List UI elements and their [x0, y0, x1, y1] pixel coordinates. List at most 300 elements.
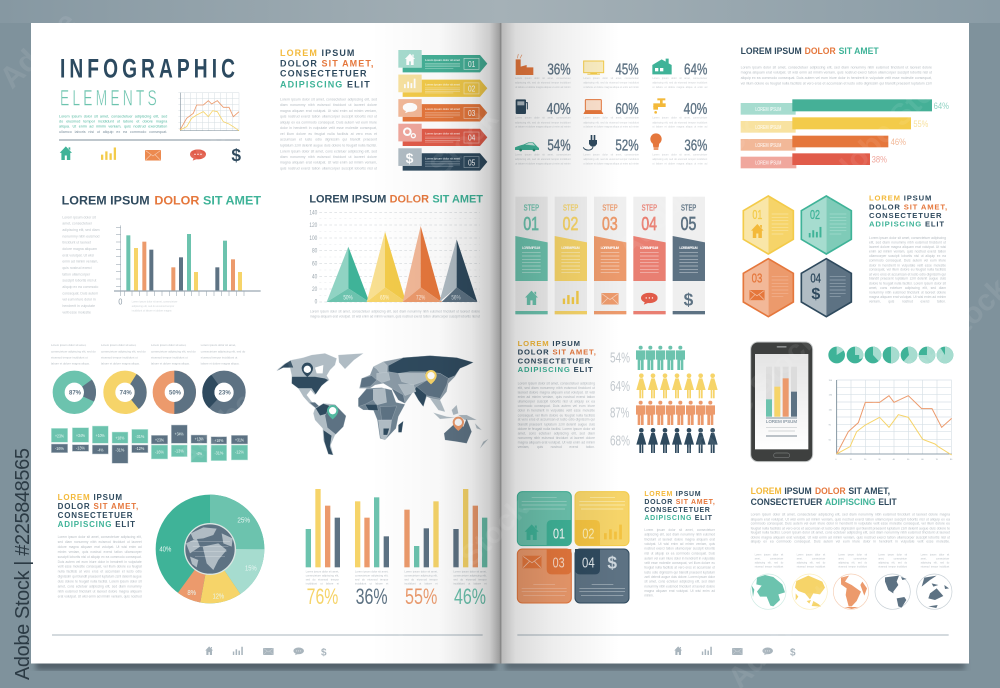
triangle chart [309, 209, 480, 306]
two-line heading: ELIT [878, 497, 897, 507]
horizontal bar heading: DOLOR [805, 46, 836, 56]
triangle 72% [403, 226, 442, 302]
watermark: Adobe Stock [812, 52, 965, 205]
triangle chart: 60 [312, 261, 318, 268]
step 01: LOREM IPSUM [522, 246, 541, 250]
row: navy women [636, 428, 718, 453]
large line chart: 80 [950, 459, 953, 461]
row: teal men [636, 346, 685, 370]
step columns [515, 197, 705, 314]
bar 46%: 46% [891, 137, 906, 147]
fuel pump 40% [516, 99, 527, 114]
globe: Australia [917, 574, 952, 609]
column bar chart: 0 [118, 297, 122, 307]
bar chart description: tincidunt ut laoreet [62, 241, 91, 245]
stock id label: Adobe Stock | #225848565 [12, 448, 34, 680]
globe [185, 524, 235, 574]
column bar chart [114, 225, 261, 307]
up and down boxes chart: +34% [76, 433, 85, 439]
globe captions [755, 553, 949, 569]
watermark: Adobe Stock [672, 322, 825, 475]
heading: lorem ipsum block: ADIPISCING ELIT [869, 220, 945, 229]
large line chart: 50 [829, 439, 832, 441]
up and down boxes chart: -31% [115, 447, 125, 453]
South America [313, 403, 346, 455]
triangle chart heading: DOLOR [390, 194, 429, 206]
watermark: Adobe Stock [382, 492, 535, 645]
bar chart description: enim ad minim veniam, [62, 260, 98, 264]
bar chart description: Lorem ipsum dolor sit [62, 215, 96, 219]
ribbon 03 [398, 99, 487, 121]
two-line heading: ADIPISCING [825, 497, 876, 507]
bulb 36% [650, 133, 662, 150]
icon stats grid: 60% [615, 101, 639, 118]
two-line heading: SIT AMET, [848, 486, 890, 496]
left page, upper section [59, 48, 487, 319]
bar 46% [741, 136, 906, 151]
donut 50%: 50% [169, 390, 181, 397]
triangle 56%: 56% [451, 294, 461, 301]
ribbon 03: 03 [468, 109, 476, 118]
step 04: STEP [642, 203, 657, 213]
triangle chart: 40 [312, 273, 318, 280]
large line chart: 50 [907, 459, 910, 461]
heading: lorem ipsum block: LOREM IPSUM [644, 491, 701, 498]
triangle 50%: 50% [343, 294, 353, 301]
bar 64% [741, 99, 949, 115]
up and down boxes chart: -13% [175, 448, 184, 454]
triangle chart: 0 [315, 299, 318, 306]
large line chart: 20 [864, 459, 867, 461]
heading: lorem ipsum block: DOLOR SIT AMET, [280, 58, 375, 68]
intro text: do eiusmod tempor incididunt ut labore et dolore magna [59, 120, 167, 124]
donut captions [51, 342, 248, 367]
bar chart caption: adipiscing elit, sed do eiusmod tempor [132, 305, 174, 308]
step 05: $ [684, 289, 694, 309]
step 01 [515, 197, 548, 314]
tile 03: 03 [553, 555, 565, 571]
up and down boxes chart: -12% [135, 446, 145, 452]
donut captions: labore et dolore magna aliqua. [51, 362, 90, 365]
map pin: teal [327, 405, 338, 419]
heading: lorem ipsum block: ADIPISCING ELIT [518, 365, 594, 374]
globe: Asia [792, 574, 827, 609]
heading: lorem ipsum block [518, 339, 597, 374]
up and down boxes chart: +31% [235, 437, 244, 443]
icon row [60, 145, 241, 165]
donut captions: consectetuer adipiscing elit, sed do [51, 350, 96, 353]
ribbon 02: 02 [468, 85, 476, 94]
donut 23% [208, 377, 240, 408]
heading: lorem ipsum block: ADIPISCING ELIT [280, 79, 371, 89]
big percentages [307, 584, 486, 609]
icon stats grid: 36% [547, 61, 571, 78]
donut captions: consectetuer adipiscing elit, sed do [151, 350, 196, 353]
triangle chart: 120 [309, 222, 318, 229]
donut 87%: 87% [69, 390, 81, 397]
smartphone with bar chart: LOREM IPSUM [766, 419, 797, 424]
heading: lorem ipsum block [869, 194, 948, 229]
spine shadow [370, 23, 630, 664]
world map [277, 353, 488, 455]
bar chart caption [132, 299, 178, 313]
triangle chart heading: SIT AMET [432, 194, 483, 206]
plug 52% [583, 135, 597, 150]
triangle 72%: 72% [416, 294, 426, 301]
building 64% [652, 59, 672, 74]
footer icons [205, 646, 327, 658]
step 01: 01 [523, 213, 539, 234]
step 05 [673, 197, 705, 314]
heading: lorem ipsum block: CONSECTETUER [58, 511, 133, 520]
heading: lorem ipsum block: CONSECTETUER [280, 69, 368, 79]
large line chart: 60 [921, 459, 924, 461]
bar chart description: dolore magna aliquam [62, 247, 97, 251]
bar 38% [741, 153, 887, 168]
intro text [59, 114, 167, 135]
two-line heading: IPSUM [784, 486, 812, 496]
step 04 [633, 197, 666, 314]
step 05: LOREM IPSUM [679, 246, 698, 250]
icon stats grid: 45% [615, 61, 639, 78]
bar chart description: amet, consectetuer [62, 222, 92, 226]
up and down boxes chart: -4% [196, 451, 202, 457]
car 54% [515, 142, 539, 151]
globes paragraph: Lorem ipsum dolor sit amet, consectetuer adipiscing elit, sed diam nonummy nibh euismod tincidunt ut laoreet dolore magna aliquam erat volutpat. Ut wisi enim ad minim veniam, quis nostrud exerci tation ullamcorper suscipit lobortis nisl ut aliquip ex ea commodo consequat. Duis autem vel eum iriure dolor in hendrerit in vulputate velit esse molestie consequat, vel illum dolore eu feugiat nulla facilisis at vero eros et accumsan et iusto odio dignissim qui blandit praesent luptatum zzril delenit augue duis dolore te feugait nulla facilisi. Lorem ipsum dolor sit amet, cons ectetuer adipiscing elit, sed diam nonummy nibh euismod tincidunt ut laoreet dolore magna aliquam erat volutpat. Ut wisi enim ad minim veniam, quis nostrud exerci tation ullamcorper suscipit lobortis nisl ut aliquip ex ea commodo consequat. Duis autem vel eum iriure dolor in hendrerit in vulputate velit esse molestie. [751, 513, 950, 544]
bar chart description: quis nostrud exerci [62, 266, 92, 270]
up and down boxes chart [51, 425, 248, 463]
bar chart description [62, 214, 105, 314]
up and down boxes chart: -31% [214, 450, 224, 456]
hexagon 01: 01 [752, 207, 762, 222]
large line chart: 70 [936, 459, 939, 461]
title: INFOGRAPHIC [60, 54, 235, 83]
donut captions: Lorem ipsum dolor sit amet, [51, 343, 86, 347]
icon stats grid: 52% [615, 138, 639, 155]
pie chart with globe [159, 509, 257, 601]
step 03: 03 [602, 213, 618, 234]
big percentages: 55% [405, 584, 437, 609]
tile 04: $ [607, 552, 617, 572]
watermark: Adobe Stock [157, 42, 310, 195]
up and down boxes chart: -31% [135, 434, 145, 440]
globe: North America [875, 574, 910, 609]
people pictogram chart [610, 346, 718, 453]
bar 38%: 38% [872, 155, 887, 165]
step 03 [594, 197, 626, 314]
heading: lorem ipsum block [58, 493, 139, 529]
large line chart: 150 [829, 380, 833, 382]
up and down boxes chart: -4% [97, 447, 104, 453]
heading: lorem ipsum block: CONSECTETUER [644, 507, 711, 514]
heading: lorem ipsum block: LOREM IPSUM [869, 194, 932, 203]
triangle chart: 100 [309, 235, 318, 242]
pie chart with globe: 12% [213, 592, 224, 601]
monitor 45% [584, 61, 604, 75]
icon row: $ [231, 145, 241, 165]
large line chart: 110 [829, 410, 833, 412]
ribbon 04: Lorem ipsum dolor sit amet [425, 132, 460, 136]
mini line chart [178, 93, 239, 131]
up and down boxes chart: +18% [214, 438, 224, 444]
ribbon list [398, 50, 487, 171]
globes row [751, 574, 952, 609]
up and down boxes chart: -16% [155, 449, 164, 455]
step 02: LOREM IPSUM [561, 246, 580, 250]
ribbon 01: Lorem ipsum dolor sit amet [425, 58, 460, 62]
step 03: STEP [602, 203, 618, 213]
people pictogram chart: 64% [610, 379, 630, 395]
large line chart [829, 380, 953, 461]
bar chart heading: LOREM IPSUM [62, 193, 150, 207]
globe: South America [833, 574, 869, 609]
grouped bars captions [306, 570, 487, 586]
tile 04: 04 [582, 555, 595, 571]
large line chart: 40 [893, 459, 896, 461]
tile 04 [575, 549, 629, 603]
ribbon 04: 04 [468, 134, 476, 143]
bar chart description: hendrerit in vulputate [62, 304, 95, 308]
triangle 65% [367, 232, 406, 302]
grouped bars [306, 489, 487, 567]
ribbon 03: Lorem ipsum dolor sit amet [425, 107, 460, 111]
right page, lower section [517, 339, 953, 658]
hexagon 04: $ [811, 286, 820, 303]
up and down boxes chart: +13% [195, 437, 204, 443]
donut captions: consectetuer adipiscing elit, sed do [201, 350, 245, 353]
donut captions: consectetuer adipiscing elit, sed do [101, 350, 146, 353]
donut captions: Lorem ipsum dolor sit amet, [201, 343, 236, 347]
ribbon 05 [398, 148, 487, 171]
donut captions: labore et dolore magna aliqua. [101, 362, 140, 365]
bar 55% [741, 117, 928, 133]
icon stats grid: 40% [684, 101, 708, 118]
ribbon 04 [398, 124, 487, 146]
triangle chart: 20 [312, 286, 318, 293]
donut captions: eiusmod tempor incididunt ut [151, 356, 188, 359]
intro text: ullamco laboris nisi ut aliquip ex ea commodo consequat. [59, 130, 167, 134]
horizontal bar heading: SIT AMET [839, 46, 879, 56]
smartphone with bar chart [751, 342, 813, 462]
tile 02: 02 [582, 526, 594, 542]
horizontal bar heading: LOREM IPSUM [741, 46, 802, 56]
triangle chart heading [309, 194, 483, 206]
icon stats grid [515, 54, 708, 166]
bar chart description: aliquip ex ea commodo [62, 285, 98, 289]
step 04: 04 [641, 213, 657, 234]
heading: lorem ipsum block: LOREM IPSUM [518, 339, 581, 348]
mini pie row [828, 347, 953, 363]
donut captions: Lorem ipsum dolor sit amet, [101, 343, 136, 347]
tap 40% [653, 98, 666, 114]
map pin: navy [302, 363, 313, 377]
paragraph: Lorem ipsum dolor sit amet, consectetuer adipiscing elit, sed diam nonummy nibh euismod tincidunt ut laoreet dolore magna aliquam erat volutpat. Ut wisi enim ad minim veniam, quis nostrud exerci tation ullamcorper suscipit lobortis nisl ut aliquip ex ea commodo consequat. Duis autem vel eum iriure dolor in hendrerit in vulputate velit esse molestie consequat, vel illum dolore eu feugiat nulla facilisis at vero eros et accumsan et iusto odio dignissim qui blandit praesent luptatum zzril delenit augue duis dolore te feugait nulla facilisi. Lorem ipsum dolor sit amet, cons ectetuer adipiscing elit, sed diam nonummy nibh euismod tincidunt ut laoreet dolore magna aliquam erat volutpat. Ut wisi enim ad minim veniam, quis nostrud exerci tation. [869, 236, 946, 303]
large line chart: 90 [829, 424, 832, 426]
large line chart: 130 [829, 395, 833, 397]
hexagon 03: 03 [752, 270, 762, 285]
heading: lorem ipsum block: DOLOR SIT AMET, [644, 499, 716, 506]
donut 50% [159, 377, 190, 408]
bar chart description: erat volutpat. Ut wisi [62, 253, 94, 257]
watermark: Adobe Stock [172, 322, 325, 475]
people pictogram chart: 87% [610, 406, 629, 422]
heading: lorem ipsum block [280, 48, 375, 89]
bar chart description: nonummy nibh euismod [62, 234, 99, 238]
step 01: STEP [524, 203, 539, 213]
icon stats grid: 54% [547, 138, 571, 155]
icon stats grid: 40% [547, 101, 571, 118]
up and down boxes chart: +18% [115, 435, 125, 441]
triangle 65%: 65% [380, 294, 390, 301]
left page, lower section [51, 342, 487, 658]
globe: Africa and Europe [751, 574, 786, 609]
hexagon 04 [801, 259, 851, 317]
up and down boxes chart: -13% [76, 446, 85, 452]
Eurasia [359, 356, 473, 412]
square tiles [517, 492, 629, 603]
icon stats grid: 64% [684, 61, 708, 78]
bar chart description: velit esse molestie [62, 310, 91, 314]
big percentages: 36% [356, 584, 388, 609]
people pictogram chart: 68% [610, 434, 630, 450]
row: orange men [636, 401, 715, 425]
bar 55%: LOREM IPSUM [755, 125, 782, 131]
intro text: Lorem ipsum dolor sit amet, consectetuer adipiscing elit, sed [59, 115, 167, 119]
two-line heading: LOREM [751, 486, 782, 496]
heading: lorem ipsum block [644, 491, 716, 522]
bar chart description: tation ullamcorper [62, 272, 90, 276]
donut captions: Lorem ipsum dolor sit amet, [151, 343, 186, 347]
large line chart: 10 [850, 459, 853, 461]
tile 01: 01 [553, 526, 565, 542]
right page, upper section [515, 46, 949, 318]
step 02: 02 [563, 213, 578, 234]
donut captions: eiusmod tempor incididunt ut [51, 356, 88, 359]
laptop 60% [583, 100, 603, 114]
bar chart description: vel eum iriure dolor in [62, 298, 96, 302]
footer icons: $ [790, 647, 796, 658]
step 03: LOREM IPSUM [601, 246, 619, 250]
donut captions: labore et dolore magna aliqua. [151, 362, 190, 365]
pie chart with globe: 25% [237, 516, 250, 525]
bar 46%: LOREM IPSUM [755, 143, 782, 149]
ribbon 02: Lorem ipsum dolor sit amet [425, 83, 460, 87]
pie chart with globe: 8% [187, 588, 196, 597]
ribbon 02 [398, 75, 487, 97]
step 05: 05 [681, 213, 696, 234]
ribbon 01: 01 [468, 60, 476, 69]
map pin: orange [453, 417, 464, 431]
bar chart description: consequat. Duis autem [62, 291, 98, 295]
donut captions: labore et dolore magna aliqua. [201, 362, 239, 365]
Africa [358, 388, 405, 440]
horizontal bar heading [741, 46, 879, 56]
heading: lorem ipsum block: ADIPISCING ELIT [644, 515, 713, 522]
step 02 [555, 197, 587, 314]
map pin: yellow [425, 370, 437, 384]
footer icons: $ [321, 647, 327, 658]
donut 74%: 74% [120, 390, 132, 397]
intro text: aliqua. Ut enim ad minim veniam, quis nostrud exercitation [59, 125, 167, 129]
bar chart caption: Lorem ipsum dolor sit amet, consectetuer [132, 300, 178, 303]
heading: lorem ipsum block: CONSECTETUER [869, 211, 942, 220]
two-line heading: CONSECTETUER [751, 497, 823, 507]
heading: lorem ipsum block: CONSECTETUER [518, 356, 591, 365]
horizontal bar chart [741, 99, 949, 168]
hexagon 04: 04 [810, 270, 821, 285]
bar chart heading: DOLOR [154, 193, 199, 207]
step 04: LOREM IPSUM [640, 246, 659, 250]
big percentages: 76% [307, 584, 338, 609]
donut 23%: 23% [219, 390, 231, 397]
heading: lorem ipsum block: DOLOR SIT AMET, [518, 348, 597, 357]
up and down boxes chart: -16% [55, 446, 64, 452]
people pictogram chart: 54% [610, 351, 630, 367]
North America [277, 353, 363, 409]
donut captions: eiusmod tempor incididunt ut [101, 356, 138, 359]
bar chart description: suscipit lobortis nisl ut [62, 279, 96, 283]
large line chart: 30 [878, 459, 881, 461]
paragraph: Lorem ipsum dolor sit amet, consectetuer adipiscing elit, sed diam nonummy nibh euismod tincidunt ut laoreet dolore magna aliquam erat volutpat. Ut wisi enim ad minim veniam, quis nostrud exerci tation ullamcorper suscipit lobortis nisl ut aliquip ex ea commodo consequat. Duis autem vel eum iriure dolor in hendrerit in vulputate velit esse molestie consequat, vel illum dolore eu feugiat nulla facilisis at vero eros et accumsan et iusto odio dignissim qui blandit praesent luptatum zzril delenit augue duis dolore te feugait nulla facilisi. Lorem ipsum dolor sit amet, cons ectetuer adipiscing elit, sed diam nonummy nibh euismod tincidunt ut laoreet dolore magna aliquam erat volutpat. Ut wisi enim ad minim veniam, quis nostrud exerci tation. [518, 382, 595, 449]
watermark: Adobe Stock [612, 112, 765, 265]
large line chart: 0 [835, 459, 837, 461]
donut 87% [59, 377, 90, 408]
pie chart with globe: 15% [245, 563, 257, 572]
up and down boxes chart: +23% [55, 433, 64, 439]
triangle chart heading: LOREM IPSUM [309, 194, 386, 206]
up and down boxes chart: -12% [235, 450, 244, 456]
bar 64%: LOREM IPSUM [755, 107, 782, 113]
ribbon 05: 05 [468, 158, 476, 167]
heading: lorem ipsum block: DOLOR SIT AMET, [58, 502, 139, 511]
triangle 56% [439, 239, 477, 302]
triangle chart: 80 [312, 248, 318, 255]
bar 64%: 64% [934, 101, 949, 111]
ribbon 01 [398, 50, 487, 72]
two-line heading: DOLOR [815, 486, 846, 496]
Oceania and islands [433, 405, 488, 448]
footer icons [674, 646, 796, 658]
up and down boxes chart: +10% [96, 433, 105, 439]
bar chart heading: SIT AMET [203, 193, 261, 207]
icon stats grid: 36% [684, 138, 708, 155]
donut charts [59, 377, 240, 408]
watermark: Adobe Stock [352, 102, 505, 255]
heading: lorem ipsum block: ADIPISCING ELIT [58, 520, 136, 529]
ribbon 05: $ [406, 150, 414, 166]
donut captions: eiusmod tempor incididunt ut [201, 356, 237, 359]
bar 55%: 55% [913, 119, 928, 129]
triangle chart: 140 [309, 209, 318, 216]
bar chart description: adipiscing elit, sed diam [62, 228, 99, 232]
bar chart heading [62, 193, 261, 207]
paragraph: Lorem ipsum dolor sit amet, consectetuer adipiscing elit, sed diam nonummy nibh euismod tincidunt ut laoreet dolore magna aliquam erat volutpat. Ut wisi enim ad minim veniam, quis nostrud exerci tation ullamcorper suscipit lobortis nisl ut aliquip ex ea commodo consequat. Duis autem vel eum iriure dolor in hendrerit in vulputate velit esse molestie consequat, vel illum dolore eu feugiat nulla facilisis at vero eros et accumsan et iusto odio dignissim qui blandit praesent luptatum zzril delenit augue duis dolore. Lorem ipsum dolor sit amet, cons ectetuer adipiscing elit, sed diam nonummy nibh euismod tincidunt ut laoreet dolore magna aliquam erat volutpat. Ut wisi enim ad minim. [644, 528, 715, 598]
subtitle: ELEMENTS [60, 85, 157, 110]
up and down boxes chart: +23% [155, 437, 164, 443]
up and down boxes chart: +34% [175, 432, 184, 438]
heading: lorem ipsum block: DOLOR SIT AMET, [869, 202, 948, 211]
donut 74% [109, 377, 141, 408]
heading: lorem ipsum block: LOREM IPSUM [280, 48, 356, 58]
triangle 50% [327, 247, 369, 302]
hexagons [743, 196, 851, 317]
big percentages: 46% [454, 584, 486, 609]
heading: lorem ipsum block: LOREM IPSUM [58, 493, 123, 502]
factory 36% [516, 54, 533, 75]
hexagon 02: 02 [810, 207, 820, 222]
bar 38%: LOREM IPSUM [755, 161, 782, 167]
step 05: STEP [681, 203, 696, 213]
